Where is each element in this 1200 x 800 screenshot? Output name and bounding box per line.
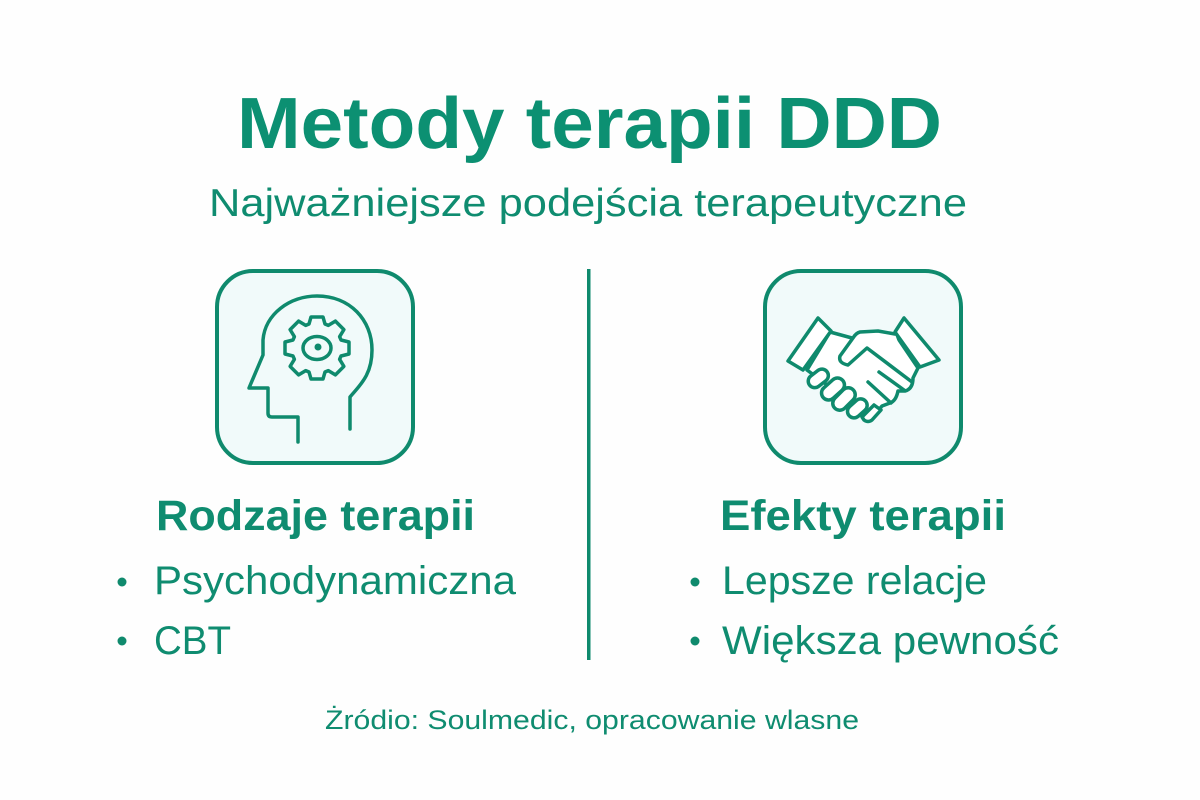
- list: therapy types: CBT: [154, 619, 231, 663]
- list: therapy effects: [690, 559, 1059, 663]
- list: therapy types: [118, 559, 517, 663]
- icon: head with gear: [217, 271, 413, 463]
- subtitle: Najważniejsze podejścia terapeutyczne: [209, 182, 967, 225]
- panel: effects of therapy: [690, 271, 1059, 663]
- heading: Rodzaje terapii: Rodzaje terapii: [156, 492, 475, 540]
- list: therapy effects: Lepsze relacje: [722, 559, 987, 603]
- list: therapy effects: Większa pewność: [722, 619, 1059, 663]
- title: Metody terapii DDD: [237, 84, 942, 164]
- panel: types of therapy: [118, 271, 517, 663]
- source note: Żródio: Soulmedic, opracowanie wlasne: [325, 704, 859, 735]
- list: therapy types: Psychodynamiczna: [154, 559, 517, 603]
- icon: handshake: [765, 271, 961, 463]
- heading: Efekty terapii: Efekty terapii: [720, 492, 1006, 540]
- divider between columns: [587, 269, 590, 660]
